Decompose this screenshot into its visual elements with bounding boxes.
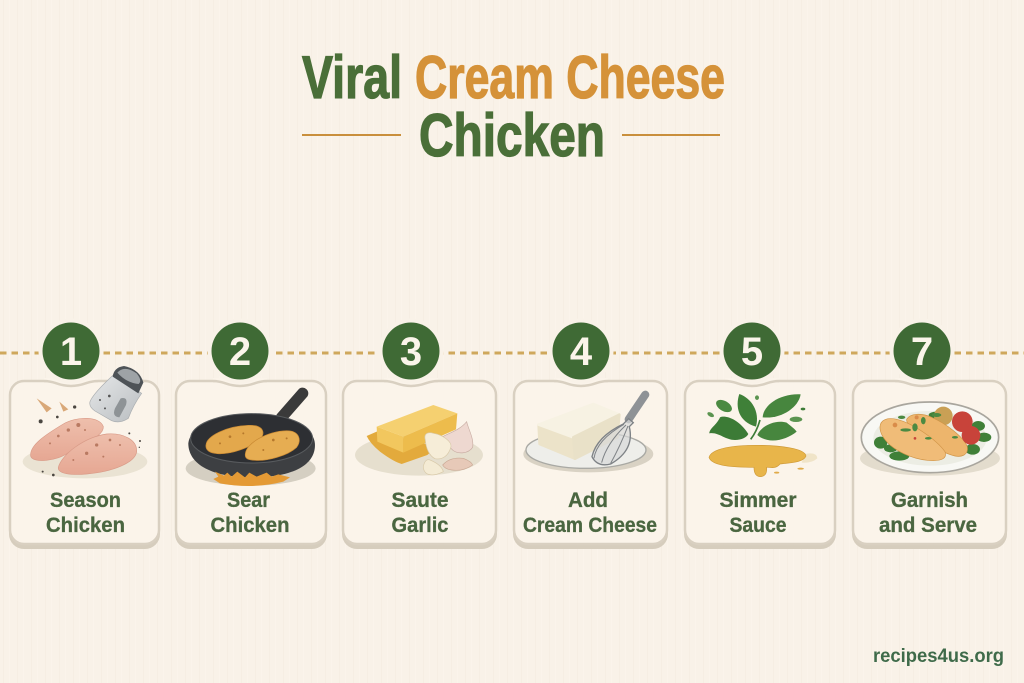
label: Chicken (210, 514, 290, 537)
title: Chicken (419, 102, 605, 169)
icon: seasoned chicken and shaker (23, 366, 147, 478)
step number 5: 5 (741, 330, 763, 374)
label: Saute (392, 489, 448, 512)
step number 3 (382, 322, 440, 380)
label: Add (568, 489, 608, 512)
title: Viral (302, 44, 402, 111)
step number 7: 7 (911, 330, 933, 374)
title (302, 44, 725, 169)
icon: butter and garlic (355, 405, 483, 476)
panel: step 5 simmer sauce (684, 318, 836, 549)
step number 1: 1 (60, 330, 82, 374)
icon: herbs and sauce (706, 394, 817, 477)
panel: step 7 garnish and serve (852, 318, 1007, 549)
label: Sear (227, 489, 270, 512)
label: Season (50, 489, 121, 512)
panel: step 1 season chicken (9, 318, 160, 549)
website credit: recipes4us.org (873, 646, 1004, 667)
label: and Serve (879, 514, 977, 537)
label: Garnish (891, 489, 968, 512)
label: Cream Cheese (523, 514, 657, 537)
label (210, 489, 290, 537)
icon: cream cheese block and whisk (523, 395, 653, 472)
icon: plated chicken (860, 402, 1000, 476)
label: Chicken (46, 514, 125, 537)
icon: skillet with chicken (186, 393, 316, 486)
step number 3: 3 (400, 330, 422, 374)
step number 1 (42, 322, 100, 380)
panel: step 2 sear chicken (175, 318, 327, 549)
label (720, 489, 796, 537)
label: Simmer (720, 489, 796, 512)
step number 2: 2 (229, 330, 251, 374)
panel: step 4 add cream cheese (513, 318, 668, 549)
dotted timeline (0, 352, 1024, 354)
label (523, 489, 657, 537)
label: Garlic (392, 514, 449, 537)
title: Cream Cheese (415, 44, 725, 111)
label (392, 489, 449, 537)
step number 7 (894, 322, 950, 380)
label (879, 489, 977, 537)
label (46, 489, 125, 537)
step number 4: 4 (570, 330, 593, 374)
panel: step 3 saute garlic (342, 318, 497, 549)
step number 5 (724, 322, 780, 380)
label: Sauce (730, 514, 786, 537)
step number 4 (552, 322, 610, 380)
step number 2 (212, 322, 268, 380)
